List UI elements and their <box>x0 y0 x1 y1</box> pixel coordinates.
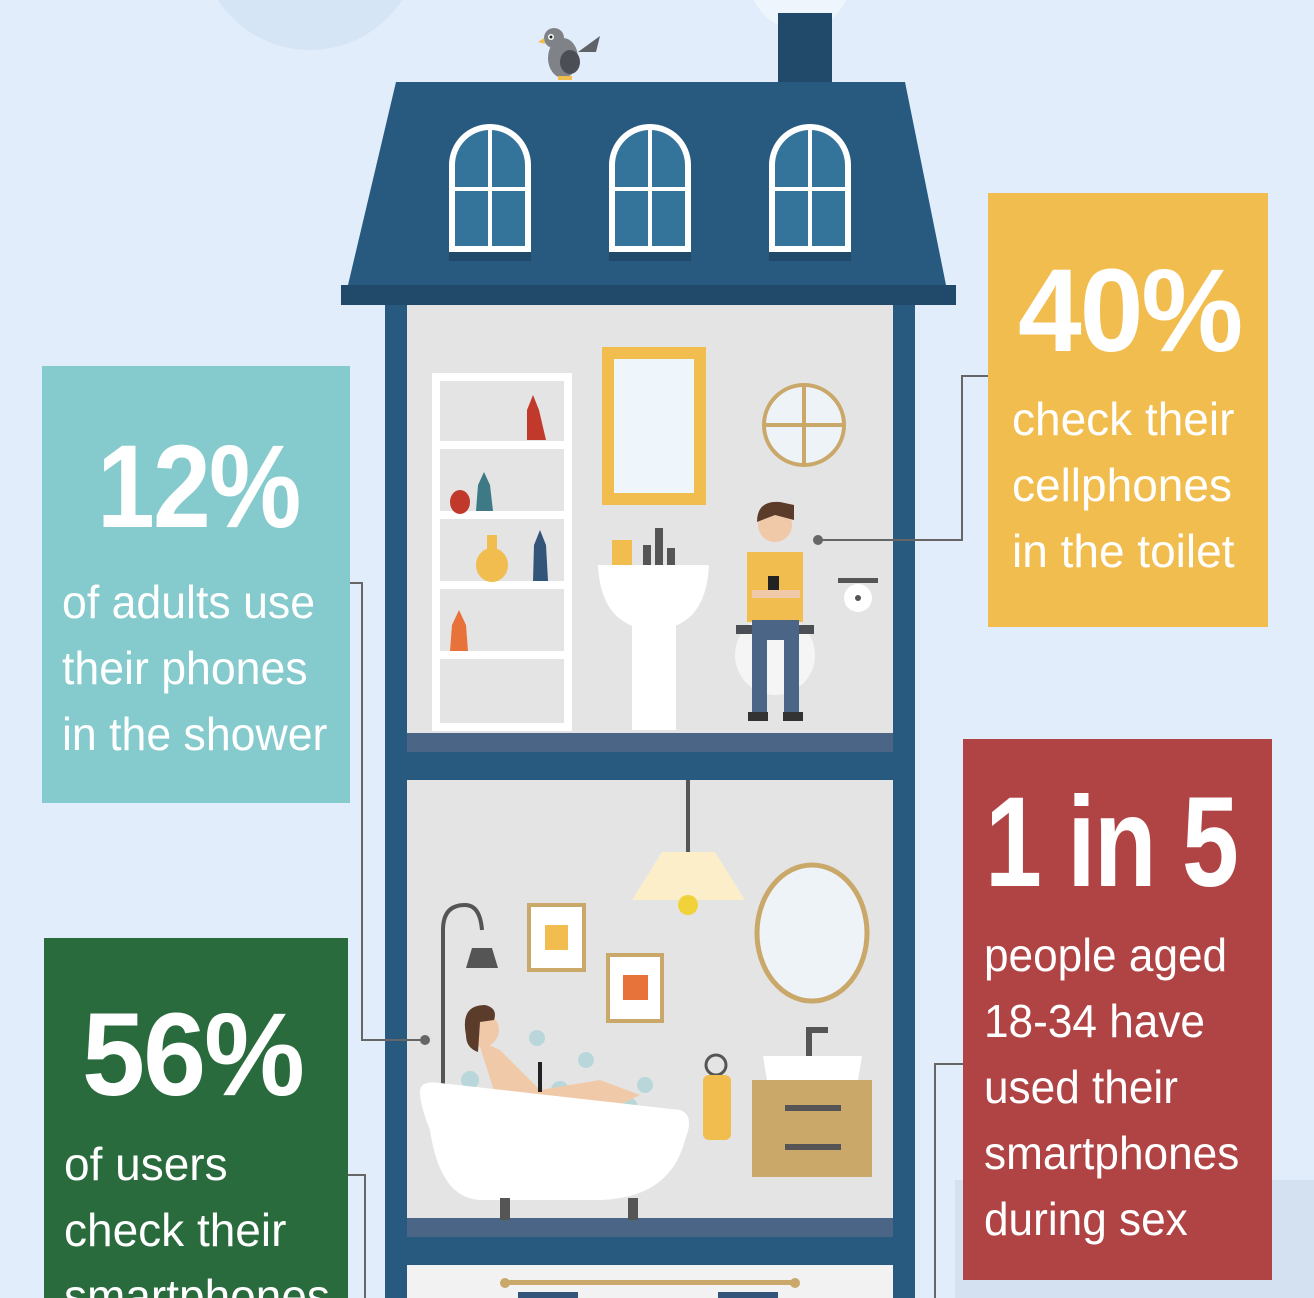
person on toilet <box>735 502 815 721</box>
dormer windows <box>449 124 851 261</box>
panel: 56%: 56% <box>82 989 303 1121</box>
panel: 56%: check their <box>64 1204 286 1256</box>
walls <box>385 305 915 1298</box>
room 2: lamp <box>632 780 745 915</box>
vanity <box>752 1027 872 1177</box>
sink <box>598 528 709 730</box>
panel: 40% toilet <box>988 193 1268 627</box>
panel: 40% toilet: check their <box>1012 393 1234 445</box>
panel: 1 in 5: people aged <box>984 929 1227 981</box>
room 3 curtain rod <box>500 1278 800 1298</box>
panel: 1 in 5: 18-34 have <box>984 995 1205 1047</box>
connectors <box>348 376 988 1298</box>
panel: 1 in 5: during sex <box>984 1193 1188 1245</box>
bathtub with woman <box>420 1005 689 1220</box>
panel: 56% <box>44 938 348 1298</box>
frames <box>529 905 584 970</box>
panel: 40% toilet: 40% <box>1018 245 1241 377</box>
chimney <box>778 13 832 83</box>
panel: 1 in 5: 1 in 5 <box>985 771 1237 914</box>
panel: 12% shower: their phones <box>62 642 308 694</box>
panel: 12% shower: of adults use <box>62 576 315 628</box>
panel: 12% shower <box>42 366 350 803</box>
room 1: shelf <box>436 377 568 727</box>
oval mirror <box>757 865 867 1001</box>
panel: 56%: of users <box>64 1138 228 1190</box>
roof <box>341 82 956 305</box>
floor lamp <box>443 905 482 1095</box>
panel: 1 in 5: smartphones <box>984 1127 1239 1179</box>
toilet paper <box>838 578 878 612</box>
panel: 1 in 5 <box>963 739 1272 1280</box>
bird <box>538 28 600 80</box>
panel: 1 in 5: used their <box>984 1061 1178 1113</box>
panel: 12% shower: in the shower <box>62 708 327 760</box>
panel: 12% shower: 12% <box>97 421 300 553</box>
towel <box>703 1055 731 1140</box>
panel: 40% toilet: cellphones <box>1012 459 1232 511</box>
mirror <box>602 347 706 505</box>
panel: 40% toilet: in the toilet <box>1012 525 1234 577</box>
round window <box>764 385 844 465</box>
